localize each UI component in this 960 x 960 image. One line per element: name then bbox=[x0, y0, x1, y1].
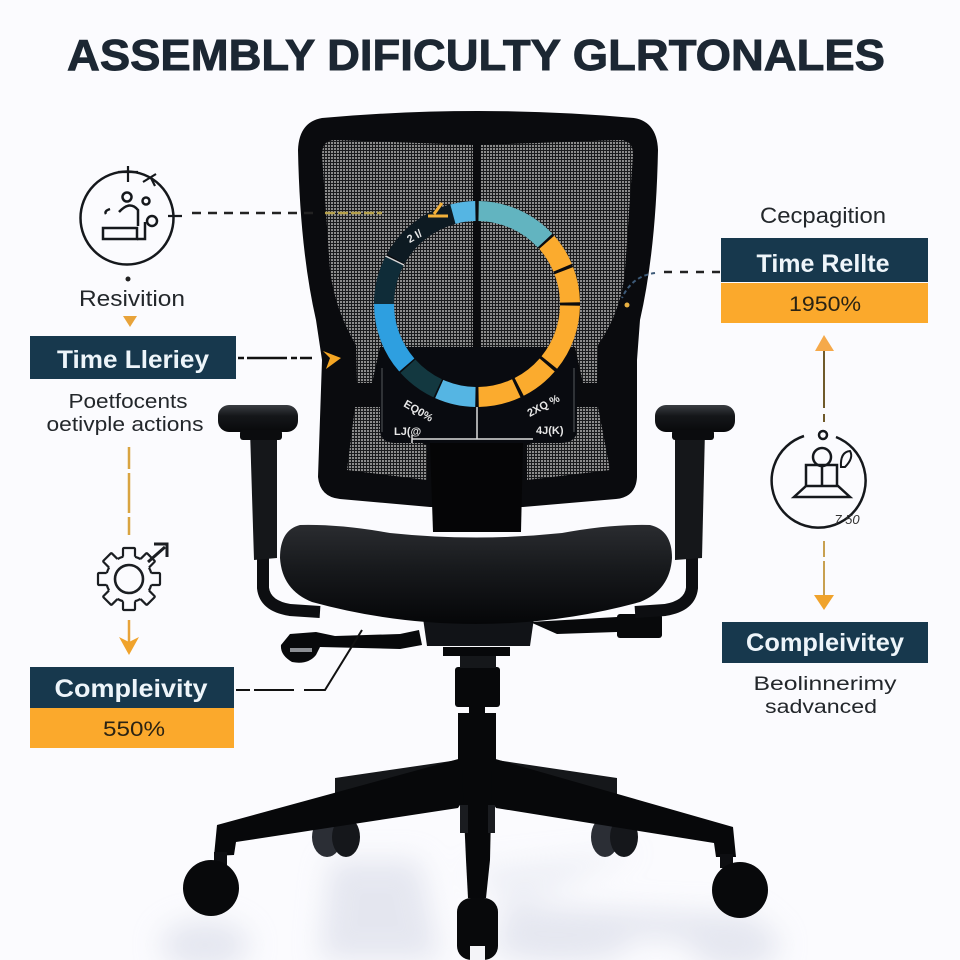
box: Time Lleriey bbox=[30, 336, 236, 379]
label: Cecpagition: Cecpagition bbox=[760, 203, 886, 228]
left armrest bbox=[218, 405, 320, 612]
lumbar support bbox=[380, 347, 577, 443]
ring chart bbox=[384, 211, 570, 443]
ring segments bbox=[384, 211, 570, 397]
gas lift column bbox=[423, 618, 534, 763]
icon: top left process bbox=[80, 166, 182, 264]
box: Time Lleriey: Time Lleriey bbox=[57, 346, 209, 374]
box: left complexity bbox=[30, 667, 234, 748]
seat cushion bbox=[280, 525, 672, 624]
label: Resivition: Resivition bbox=[79, 286, 185, 311]
ring labels: LJ(@ bbox=[394, 426, 422, 438]
arrow: up to right box bbox=[815, 335, 834, 422]
icon: right person at desk bbox=[772, 431, 866, 528]
text: right description: Beolinnerimy bbox=[754, 674, 897, 695]
front caster bbox=[457, 898, 498, 960]
backrest frame bbox=[298, 111, 658, 507]
ring bracket bbox=[412, 407, 533, 443]
title: ASSEMBLY DIFICULTY GLRTONALES bbox=[67, 31, 885, 80]
connector: top left icon to ring bbox=[192, 203, 448, 216]
box: Time Rellte: 1950% bbox=[789, 293, 861, 316]
dot bbox=[126, 276, 130, 282]
ring underlay bbox=[384, 211, 570, 397]
connector: complexity box to lever bbox=[236, 630, 362, 690]
text: right description bbox=[754, 674, 897, 718]
text: left description: oetivple actions bbox=[46, 414, 204, 436]
ring labels: 2 I/ bbox=[405, 228, 424, 246]
left caster bbox=[183, 852, 239, 916]
text: left description: Poetfocents bbox=[68, 391, 188, 413]
box: left complexity: 550% bbox=[103, 718, 165, 741]
floor shadows bbox=[160, 850, 780, 960]
icon: gear bbox=[98, 544, 167, 610]
box: Time Rellte: Time Rellte bbox=[756, 250, 890, 278]
right armrest bbox=[635, 405, 735, 612]
connector: right box to chair bbox=[622, 272, 720, 308]
ring labels: EQ0% bbox=[401, 398, 435, 425]
office chair bbox=[183, 111, 768, 960]
left tilt lever bbox=[281, 630, 422, 663]
rear casters bbox=[312, 817, 638, 857]
icon: small arrow bbox=[123, 316, 137, 327]
text: right description: sadvanced bbox=[765, 697, 877, 718]
ring labels: 4J(K) bbox=[536, 425, 564, 437]
backrest spine bbox=[430, 443, 523, 532]
box: left complexity: Compleivity bbox=[54, 675, 208, 703]
arrow: down to complexity bbox=[119, 620, 139, 655]
ring labels: 2XQ % bbox=[526, 393, 562, 420]
arrow: down to right complexity bbox=[814, 541, 834, 610]
icon: right person at desk: 7 50 bbox=[834, 512, 860, 527]
box: right complexity bbox=[722, 622, 928, 663]
backrest mesh bbox=[322, 140, 633, 480]
text: left description bbox=[46, 391, 204, 436]
box: Time Rellte bbox=[721, 238, 928, 323]
box: right complexity: Compleivitey bbox=[746, 629, 904, 657]
chair base bbox=[214, 755, 736, 898]
right caster bbox=[712, 854, 768, 918]
right height lever bbox=[530, 614, 662, 638]
connector: time box to chair bbox=[238, 351, 341, 369]
ring labels bbox=[394, 228, 564, 438]
connector: left vertical dashed bbox=[128, 447, 130, 535]
gear teeth bbox=[98, 548, 160, 610]
